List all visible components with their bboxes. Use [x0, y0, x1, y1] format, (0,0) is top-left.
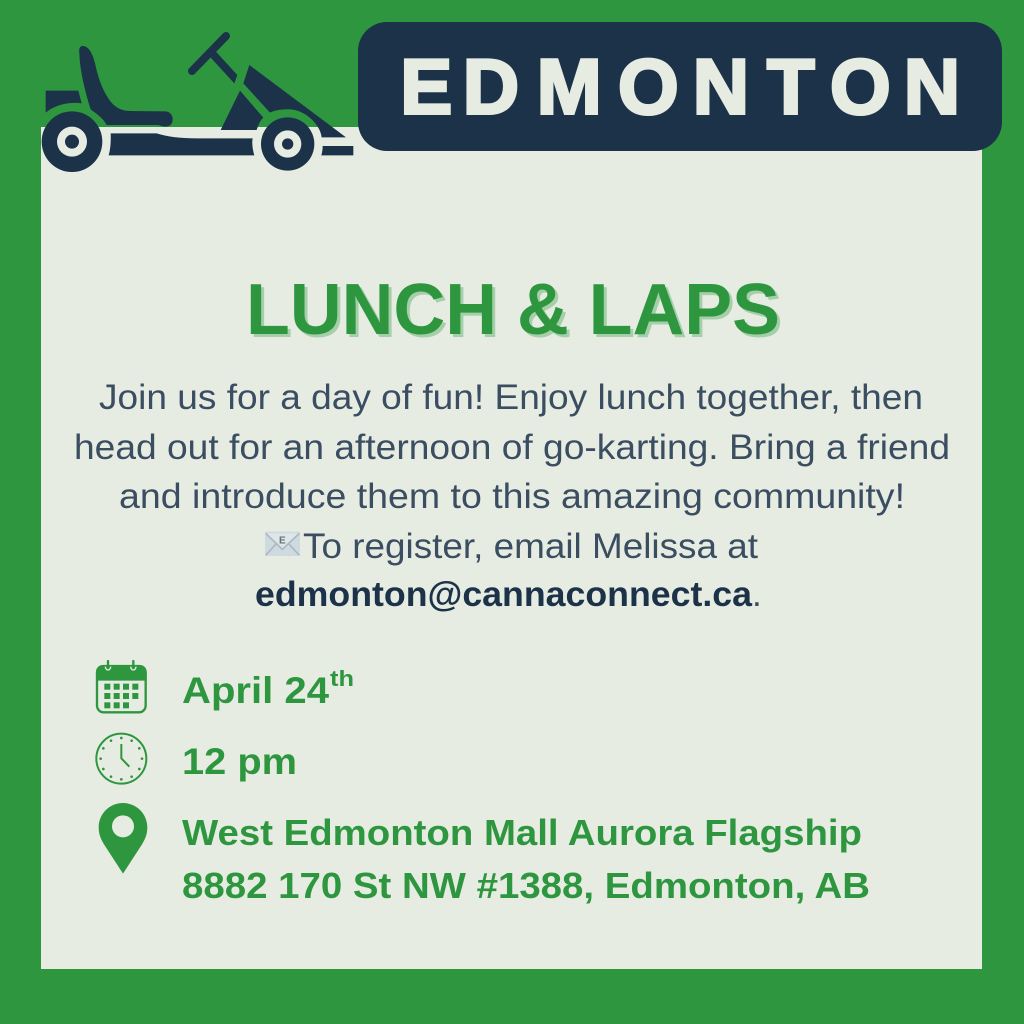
icon: map pin: [99, 803, 147, 874]
text: date: th: [330, 666, 354, 691]
panel: content background: [41, 127, 982, 969]
title: LUNCH & LAPS: [249, 273, 783, 353]
text block: description: and introduce them to this amazing community!: [119, 477, 905, 516]
text block: description: edmonton@cannaconnect.ca: [255, 575, 753, 614]
badge: city name: EDMONTON: [400, 42, 960, 130]
text: location: 8882 170 St NW #1388, Edmonton, AB: [182, 865, 870, 906]
title: LUNCH & LAPS: [246, 270, 780, 350]
text block: description: head out for an afternoon of go-karting. Bring a friend: [74, 428, 950, 467]
icon: envelope: E: [279, 535, 286, 546]
icon: clock: [96, 734, 146, 784]
text: date: April 24: [182, 670, 329, 711]
text block: description: [74, 378, 950, 614]
badge: city name: [358, 22, 1002, 151]
text block: description: To register, email Melissa at: [303, 527, 758, 566]
text: time: 12 pm: [182, 741, 297, 782]
text: location: [182, 812, 870, 906]
icon: go-kart: [42, 36, 353, 172]
icon: calendar: [96, 661, 147, 712]
text block: description: Join us for a day of fun! Enjoy lunch together, then: [99, 378, 923, 417]
text: location: West Edmonton Mall Aurora Flagship: [182, 812, 862, 853]
icon: envelope: [265, 532, 300, 556]
text block: description: .: [752, 575, 762, 614]
